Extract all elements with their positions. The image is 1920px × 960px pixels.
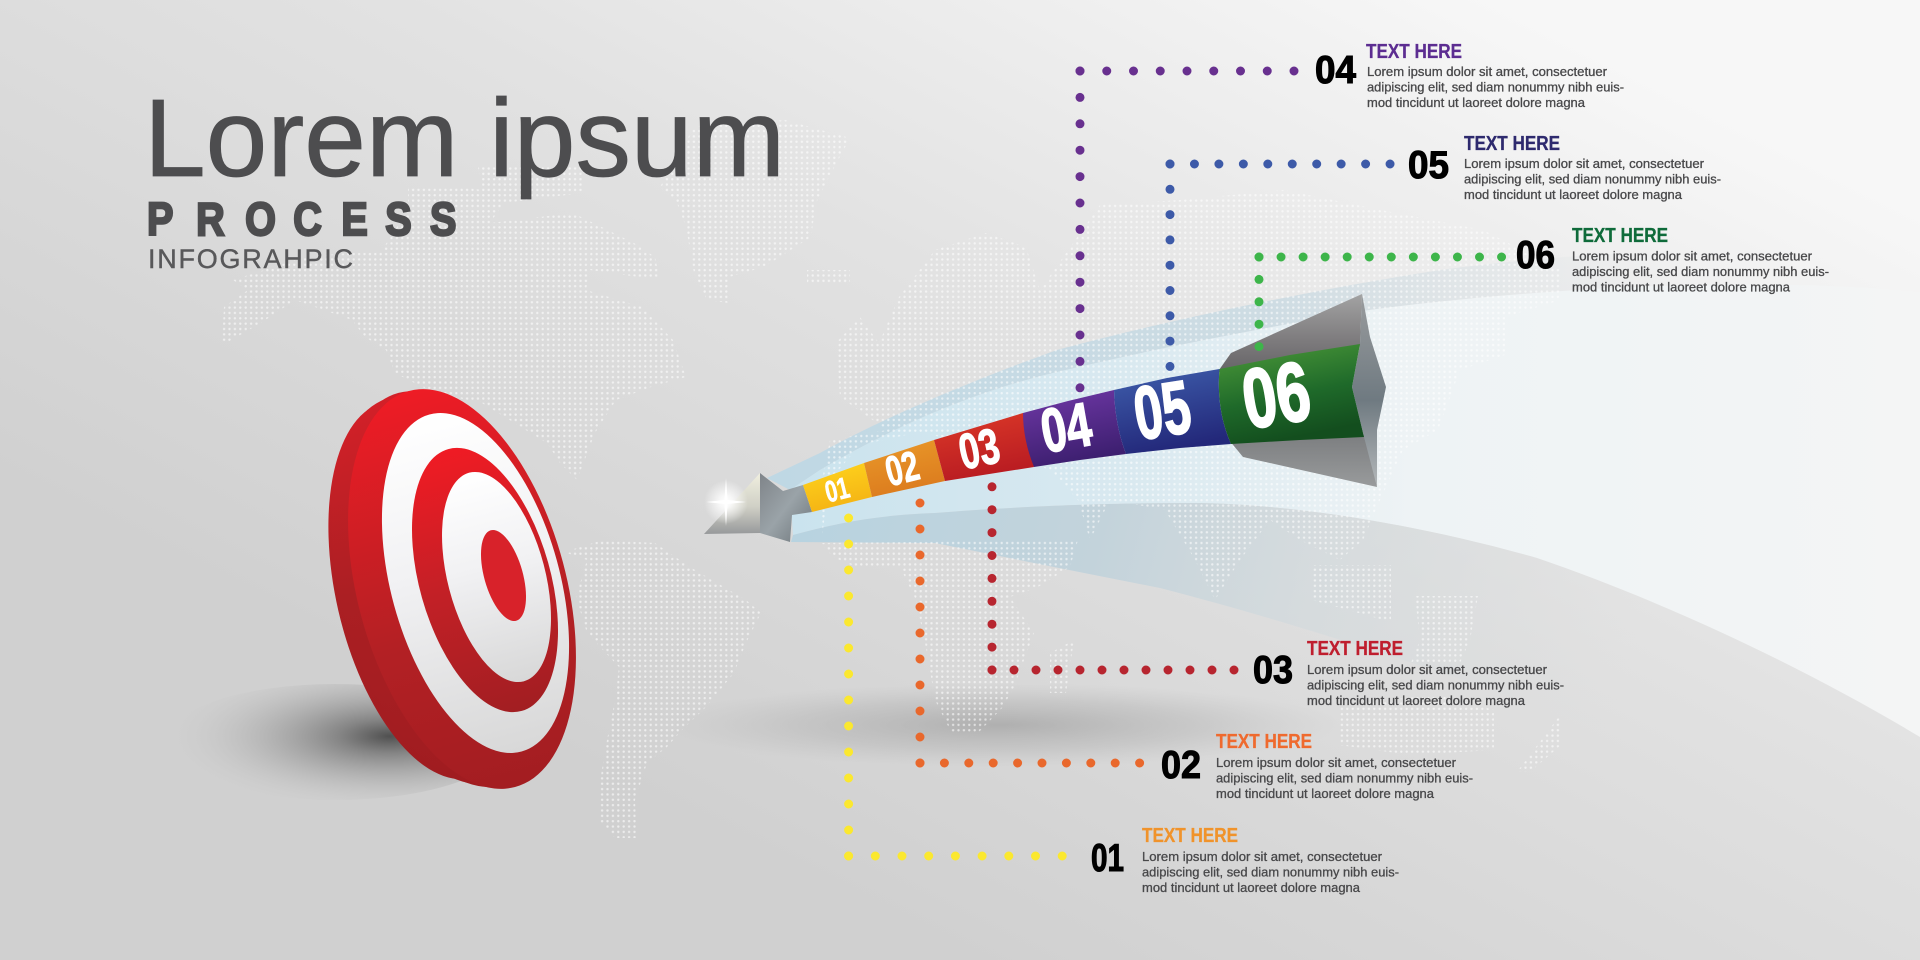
callout 04 [1315, 40, 1624, 110]
callout 02 number: 02 [1161, 744, 1201, 787]
fletching top [1219, 294, 1362, 372]
arrow head tip [704, 473, 760, 534]
callout 06 body: Lorem ipsum dolor sit amet, consectetuer [1572, 249, 1813, 264]
target outer white ring [348, 392, 603, 774]
target inner white ring [422, 460, 571, 694]
segment 03 [934, 413, 1034, 481]
callout 05 body: Lorem ipsum dolor sit amet, consectetuer [1464, 156, 1705, 171]
callout 03 [1253, 637, 1564, 708]
callout 01 [1091, 824, 1399, 895]
swoosh: white light band [790, 285, 1920, 737]
fletching right [1352, 294, 1386, 487]
callout 04 heading: TEXT HERE [1366, 40, 1462, 63]
callout 05 body [1464, 156, 1721, 202]
number 01 on arrow: 01 [822, 472, 853, 509]
number 03 on arrow: 03 [954, 417, 1005, 481]
callout 03 body: adipiscing elit, sed diam nonummy nibh euis- [1307, 677, 1564, 692]
dotted connector 05 [1170, 164, 1391, 368]
segment 05 [1114, 369, 1231, 454]
callout 01 body [1142, 849, 1399, 895]
callout 03 number: 03 [1253, 649, 1293, 692]
segment 04 [1023, 390, 1126, 467]
callout 06 body: adipiscing elit, sed diam nonummy nibh euis- [1572, 264, 1829, 279]
callout 03 body: Lorem ipsum dolor sit amet, consectetuer [1307, 662, 1548, 677]
number 06 on arrow: 06 [1236, 343, 1317, 447]
callout 01 body: mod tincidunt ut laoreet dolore magna [1142, 880, 1361, 895]
target side extrusion [293, 366, 604, 812]
dotted connector 06 [1259, 257, 1502, 348]
callout 05 heading: TEXT HERE [1464, 132, 1560, 155]
callout 02 heading: TEXT HERE [1216, 730, 1312, 753]
swoosh: upper pale blue band [767, 250, 1680, 490]
segment 01 [803, 463, 872, 512]
title block [144, 77, 785, 274]
segment 02 [864, 440, 945, 497]
dotted connector 02 [920, 502, 1141, 763]
arrow [704, 294, 1386, 542]
arrow tip shine [704, 478, 748, 526]
swoosh: lower blue grey band [791, 503, 1920, 860]
callout 06 body: mod tincidunt ut laoreet dolore magna [1572, 280, 1791, 294]
callout 04 body [1367, 64, 1624, 110]
segment 06 [1219, 344, 1364, 444]
callout 05 number: 05 [1408, 144, 1449, 187]
callout 04 body: Lorem ipsum dolor sit amet, consectetuer [1367, 64, 1608, 79]
subtitle: PROCESS: PROCESS [147, 194, 456, 246]
callout 02 body: Lorem ipsum dolor sit amet, consectetuer [1216, 755, 1457, 770]
number 02 on arrow: 02 [880, 442, 924, 495]
arrow head notch [760, 473, 812, 542]
dotted connector 04 [1080, 71, 1295, 388]
target [293, 364, 616, 814]
callout 03 body [1307, 662, 1564, 708]
fletching bottom [1229, 435, 1377, 487]
callout 01 body: Lorem ipsum dolor sit amet, consectetuer [1142, 849, 1383, 864]
callout 06 [1516, 224, 1829, 294]
callout 02 body [1216, 755, 1473, 801]
callout 04 body: mod tincidunt ut laoreet dolore magna [1367, 95, 1586, 110]
callout 02 body: mod tincidunt ut laoreet dolore magna [1216, 786, 1435, 801]
callout 01 heading: TEXT HERE [1142, 824, 1238, 847]
number 04 on arrow: 04 [1036, 390, 1097, 467]
callout 05 body: mod tincidunt ut laoreet dolore magna [1464, 187, 1683, 202]
subtitle: INFOGRAHPIC: INFOGRAHPIC [148, 244, 353, 274]
callout 06 number: 06 [1516, 234, 1555, 277]
callout 01 body: adipiscing elit, sed diam nonummy nibh euis- [1142, 864, 1399, 879]
callout 06 body [1572, 249, 1829, 294]
target red face [308, 364, 616, 814]
target red ring [385, 431, 585, 729]
dotted connector 01 [849, 517, 1063, 856]
callout 05 body: adipiscing elit, sed diam nonummy nibh euis- [1464, 171, 1721, 186]
dotted connector 03 [992, 486, 1235, 670]
callout 03 body: mod tincidunt ut laoreet dolore magna [1307, 693, 1526, 708]
callout 04 number: 04 [1315, 49, 1356, 92]
callout 02 body: adipiscing elit, sed diam nonummy nibh euis- [1216, 770, 1473, 785]
title: Lorem ipsum: Lorem ipsum [144, 77, 785, 200]
callout 04 body: adipiscing elit, sed diam nonummy nibh euis- [1367, 79, 1624, 94]
callout 02 [1161, 730, 1473, 801]
dotted world map [222, 120, 1561, 838]
callout 06 heading: TEXT HERE [1572, 224, 1668, 247]
target bullseye [472, 525, 535, 626]
number 05 on arrow: 05 [1128, 364, 1196, 456]
floor shadow [660, 683, 1340, 767]
target shadow [165, 684, 505, 800]
callout 05 [1408, 132, 1721, 202]
callout 03 heading: TEXT HERE [1307, 637, 1403, 660]
callout 01 number: 01 [1091, 837, 1124, 880]
